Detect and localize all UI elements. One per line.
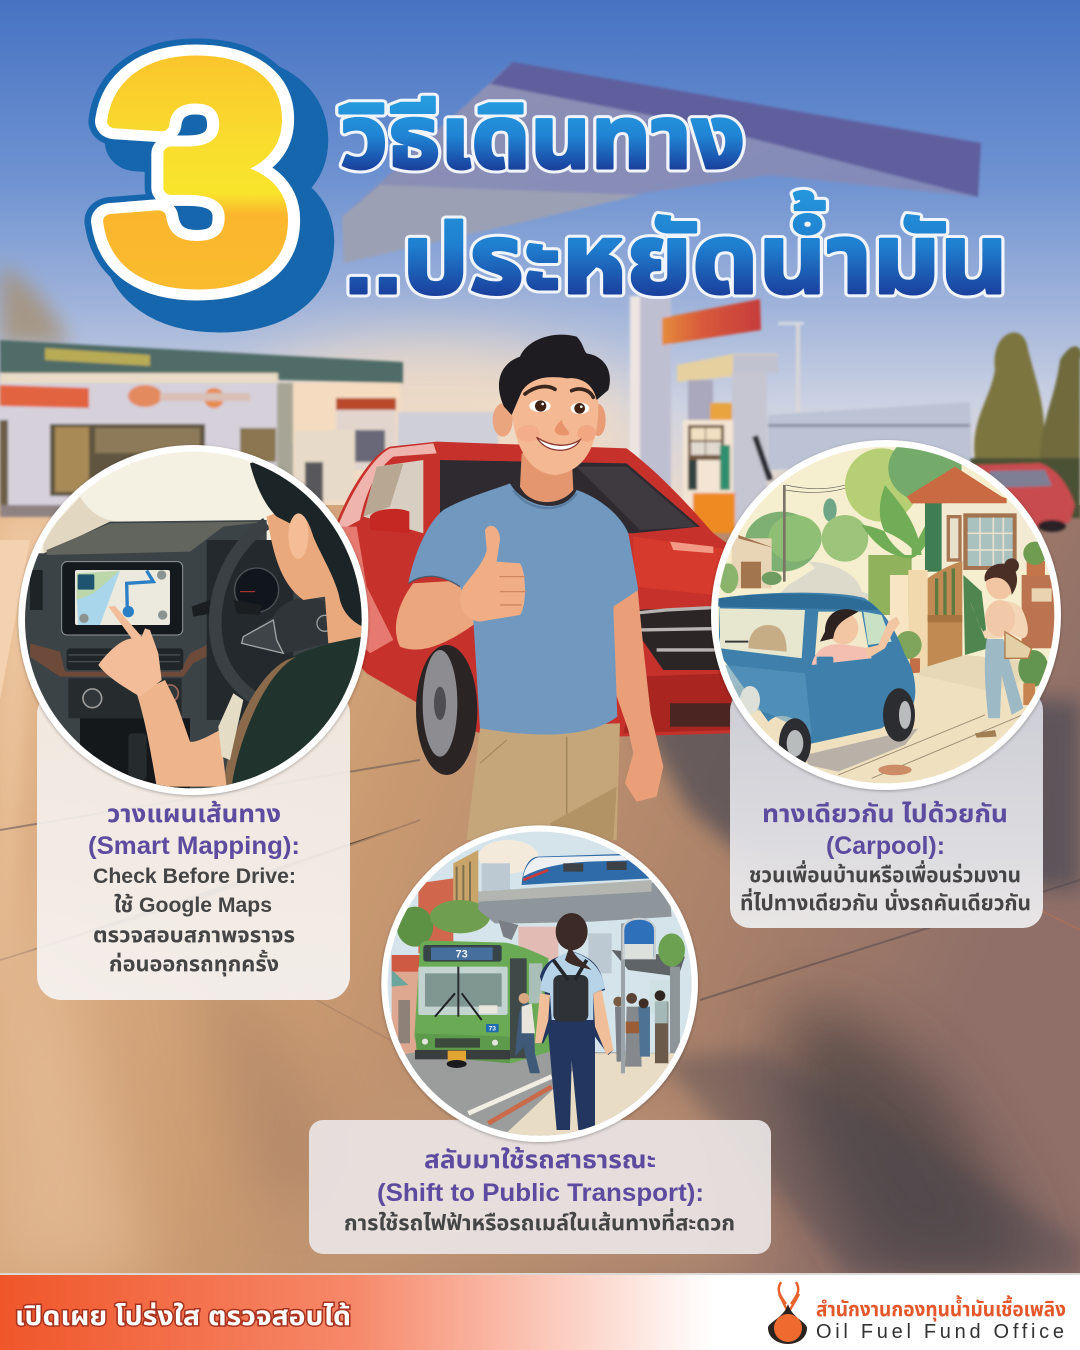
title: วิธีเดินทาง (339, 88, 745, 187)
organisation name: Oil Fuel Fund Office (816, 1321, 1064, 1343)
big number 3: 3 (103, 0, 293, 346)
red car (335, 442, 732, 775)
circle: navigation in car (10, 440, 380, 808)
footer slogan: เปิดเผย โปร่งใส ตรวจสอบได้ (15, 1301, 351, 1331)
big number 3: 3 (125, 20, 315, 367)
left card text: (Smart Mapping): (88, 832, 300, 860)
bottom card text: การใช้รถไฟฟ้าหรือรถเมล์ในเส้นทางที่สะดวก (344, 1208, 735, 1235)
title (339, 88, 1008, 314)
right card text: ทางเดียวกัน ไปด้วยกัน (762, 800, 1008, 828)
bottom card text (344, 1146, 735, 1235)
logo: oil drop with flame (768, 1282, 807, 1344)
panel: left card (37, 690, 350, 1000)
organisation name (816, 1295, 1066, 1343)
left card text: ใช้ Google Maps (114, 894, 272, 917)
circle: public transport scene: 73 (456, 949, 468, 961)
title: ..ประหยัดน้ำมัน (344, 191, 1008, 314)
man (396, 335, 663, 840)
bottom card text: สลับมาใช้รถสาธารณะ (424, 1146, 656, 1174)
character: man with red car giving a thumbs up (335, 335, 732, 840)
panel: right card (730, 690, 1043, 928)
left card text: ตรวจสอบสภาพจราจร (93, 924, 295, 947)
circle: carpool scene (705, 435, 1072, 802)
circle: public transport scene: 73 (489, 1026, 496, 1033)
bottom card text: (Shift to Public Transport): (377, 1179, 704, 1207)
circle: public transport scene (375, 820, 705, 1150)
left card text (88, 800, 300, 977)
right card text: (Carpool): (826, 832, 945, 860)
title: วิธีเดินทาง (339, 88, 745, 187)
panel: bottom card (309, 1120, 771, 1254)
right card text: ที่ไปทางเดียวกัน นั่งรถคันเดียวกัน (740, 888, 1031, 915)
organisation name: สำนักงานกองทุนน้ำมันเชื้อเพลิง (816, 1295, 1066, 1321)
right card text: ชวนเพื่อนบ้านหรือเพื่อนร่วมงาน (749, 860, 1021, 887)
big number 3: 3 (103, 0, 293, 346)
big number 3: 3 (103, 0, 293, 346)
left card text: ก่อนออกรถทุกครั้ง (109, 950, 279, 977)
left card text: Check Before Drive: (93, 865, 296, 888)
left card text: วางแผนเส้นทาง (107, 800, 281, 828)
title: ..ประหยัดน้ำมัน (344, 191, 1008, 314)
right card text (740, 800, 1031, 915)
footer bar (0, 1273, 1080, 1350)
